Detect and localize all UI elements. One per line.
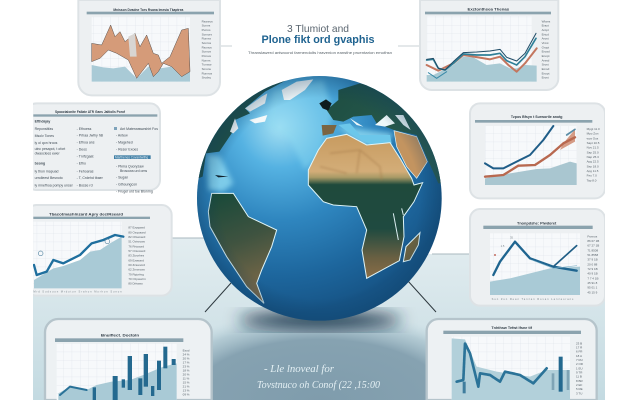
table column three: [114, 127, 158, 194]
area and line chart: [33, 222, 123, 294]
legend labels: Purros: [202, 28, 211, 32]
legend labels: Mpgt 11.0: [587, 127, 600, 131]
table column three: - Pkma Quoryzaw: [116, 165, 144, 169]
legend labels: Nap 25.3: [587, 155, 599, 159]
jagged chart: [452, 337, 570, 400]
mediterranean glow: [338, 123, 392, 144]
legend labels: Sapt 10.5: [587, 141, 600, 145]
legend labels: Gropt: [542, 45, 549, 49]
table column one: [35, 120, 74, 187]
bar and area chart: [57, 343, 177, 400]
legend labels: 80 Drhawo: [128, 282, 143, 286]
legend labels: Enopt: [542, 71, 550, 75]
iberia: [322, 125, 337, 136]
legend labels: Rsanrus: [202, 19, 213, 23]
chart title: Mnisson Dvadne Tors Rsana Imesia Tkaptrea: [113, 7, 184, 12]
peak line chart: Sun Zun Rean Tanzan Rovan Lanzaorans: [492, 297, 574, 301]
legend labels: Mpo Zun: [587, 132, 599, 136]
legend labels: Tumsor: [202, 63, 212, 67]
legend labels: 13 %: [183, 389, 190, 393]
table column three: - Magehed: [116, 141, 133, 145]
legend labels: 21 %: [183, 385, 190, 389]
legend labels: Wlarrs: [542, 19, 551, 23]
table column one: ly thon mapuad: [35, 169, 59, 173]
table column three: Brosowa urd oms: [120, 169, 147, 173]
legend labels: 5 RE: [576, 387, 583, 391]
legend labels: 18 A: [576, 354, 582, 358]
legend labels: 80 Ozqoaard: [128, 230, 146, 234]
area chart: [92, 17, 190, 82]
legend labels: 2 EF: [576, 383, 582, 387]
legend labels: Porsus: [202, 54, 211, 58]
legend labels: Somors: [202, 32, 212, 36]
legend labels: Enopt: [542, 54, 550, 58]
title: [248, 23, 392, 55]
chart title: Bnuiflect. Doctoln: [101, 333, 140, 338]
table column two: - Fehoaras: [77, 169, 94, 173]
chart title: Tzpos Bfsyn t Surwortle anotg: [511, 114, 563, 119]
globe ocean: [197, 76, 442, 321]
floor background: [33, 238, 605, 400]
legend labels: 20 0 88: [587, 262, 598, 266]
table column three: Marthenes Covantwithg: [115, 155, 148, 159]
legend labels: 9 TR: [576, 370, 583, 374]
africa: [308, 134, 423, 278]
table column three: Ant Materwawwshirt Fos: [120, 127, 158, 131]
table column three: - Gthoungcon: [116, 183, 137, 187]
chart title: Tnonpdshe: Plwdoret: [517, 221, 557, 226]
legend labels: 86 07 1B: [587, 239, 599, 243]
legend labels: 24 %: [183, 353, 190, 357]
legend labels: 72 9 1B: [587, 267, 598, 271]
legend labels: Eroad: [542, 50, 550, 54]
peak line chart: 35: [510, 235, 513, 239]
table column two: [77, 127, 104, 187]
legend labels: 1 EU: [576, 366, 583, 370]
legend labels: 60 Zzasnord: [128, 263, 145, 267]
table column one: Msolv Tones: [35, 134, 54, 138]
legend labels: Ertud: [542, 32, 549, 36]
legend labels: Esod: [183, 349, 190, 353]
chart title: Tnhthsw Tefwt Ifsne tif: [491, 325, 533, 330]
legend labels: 79 Rqtzrhrg: [128, 272, 144, 276]
peak line chart: [490, 233, 580, 301]
legend labels: Vrost: [542, 41, 549, 45]
table column two: - T, Crdehd tbaer: [77, 176, 104, 180]
legend labels: 45 15 9: [587, 290, 598, 294]
legend labels: 51 Ovtsrowo: [128, 240, 145, 244]
legend labels: 2 OR: [576, 362, 584, 366]
growth chart: [485, 126, 577, 185]
greenland and arctic ice: [230, 79, 313, 133]
legend labels: Eraot: [542, 24, 549, 28]
legend labels: Srudsy: [202, 76, 211, 80]
legend labels: Rsonus: [202, 45, 212, 49]
legend labels: 7 RU: [576, 358, 583, 362]
legend labels: 82 Chtwoard: [128, 235, 146, 239]
chart title: Tbacotmashlnzard Apry deciRseard: [49, 211, 124, 216]
legend labels: Rumss: [202, 37, 211, 41]
legend labels: Nov 21.5: [587, 146, 599, 150]
legend labels: wos Gus: [587, 136, 599, 140]
arabia: [394, 131, 427, 178]
legend labels: 87 Ezpqawd: [128, 226, 145, 230]
panel: bottom right jagged chart: [427, 319, 597, 400]
table column one: dwaoclees ewer: [35, 151, 60, 155]
legend labels: 83 Ztzorhes: [128, 254, 145, 258]
eurasia: [327, 83, 447, 183]
north america: [198, 80, 286, 178]
globe: [190, 76, 447, 321]
legend labels: 3 TU: [576, 391, 582, 395]
legend labels: 20 %: [183, 357, 190, 361]
bottom caption: - Lle lnoveal for: [264, 364, 335, 375]
legend labels: Arost: [542, 37, 549, 41]
south america: [208, 193, 277, 303]
connector lines: [205, 46, 436, 312]
table title: Spaoctalonite Fallate ATR Gans Jaltiolls Porof: [55, 109, 126, 114]
legend labels: 6 FR: [576, 350, 583, 354]
panel: right upper growth chart: [470, 103, 605, 198]
legend labels: Sumrs: [202, 24, 211, 28]
legend labels: 17 %: [183, 361, 190, 365]
globe rim shading: [197, 76, 442, 321]
legend labels: 69 Ezawsrd: [128, 258, 144, 262]
legend labels: 15 %: [183, 381, 190, 385]
legend labels: 09 %: [183, 393, 190, 397]
panel: left rising chart: [27, 205, 172, 296]
panel: left text table: [27, 103, 160, 194]
table column one: ly mnefhoa pompy unser: [35, 183, 74, 187]
legend labels: 8 BR: [576, 379, 583, 383]
legend labels: Sonros: [202, 41, 212, 45]
table column three: - Antew: [116, 134, 128, 138]
legend labels: 67 27 1B: [587, 244, 599, 248]
legend labels: Erost: [542, 76, 549, 80]
legend labels: 23 %: [183, 365, 190, 369]
legend labels: 40 9 1B: [587, 272, 598, 276]
table column two: - Tnrfzgaat: [77, 155, 93, 159]
floor shadow: [130, 310, 510, 400]
title: 3 Tlumiot and: [287, 23, 349, 35]
legend labels: 51 8558: [587, 253, 598, 257]
title: Thranslawerd antwoond farmendolts hravenion eansthe pruentarion emothsn: [248, 51, 392, 55]
legend labels: Emsd: [542, 67, 550, 71]
table column two: - Bosse rd: [77, 183, 93, 187]
title: Plone fikt ord gvaphis: [262, 34, 374, 46]
legend labels: 11 B: [576, 375, 582, 379]
legend labels: 70 Ozpwwrrn: [128, 277, 146, 281]
legend labels: Arssd: [542, 58, 550, 62]
line chart: [427, 16, 537, 82]
legend labels: Smonu: [202, 67, 211, 71]
legend labels: 11 %: [183, 377, 190, 381]
legend labels: 17 R: [576, 345, 583, 349]
table column two: - Prhaa Jwlhy hB: [77, 134, 104, 138]
legend labels: Sep 18.0: [587, 164, 599, 168]
bottom caption: [257, 364, 381, 391]
legend labels: 7 7 4 1B: [587, 276, 598, 280]
bottom caption: Tovstnuco oh Conof (22 ,15:00: [257, 380, 381, 391]
legend labels: 23 B: [576, 341, 582, 345]
caribbean: [215, 175, 228, 177]
legend labels: Srost: [542, 63, 549, 67]
legend labels: 57 Ontoswrd: [128, 249, 146, 253]
area and line chart: Mrd Sudsuon Mrdoton Srahon Morhon Sunon: [33, 290, 122, 294]
table column two: - Efhoess: [77, 127, 92, 131]
panel: right lower peak chart: [470, 209, 605, 306]
table column three: - Frugel urd toe Blonrng: [116, 190, 153, 194]
table column one: Efthdajay: [35, 120, 50, 124]
legend labels: Rumros: [202, 71, 213, 75]
legend labels: 95 01 1: [587, 286, 598, 290]
panel: top right line chart: [420, 0, 558, 90]
table column two: - Efho: [77, 161, 86, 165]
legend labels: Apg 11.5: [587, 169, 599, 173]
coastal glow: [207, 80, 393, 192]
globe land masses: [190, 79, 447, 303]
table column one: ulnc pesapot, t ofort: [35, 147, 65, 151]
table column three: - Resor Exoes: [116, 147, 138, 151]
legend labels: 71 8508: [587, 248, 598, 252]
table column one: ly ol qon hroos: [35, 141, 58, 145]
legend labels: Nomrs: [202, 58, 211, 62]
table column one: bsong: [35, 161, 45, 165]
legend labels: 20 %: [183, 373, 190, 377]
chart title: Exztonthsea Thenas: [467, 7, 510, 12]
legend labels: 62 Zrnzrowo: [128, 268, 145, 272]
table column one: Reponsitfas: [35, 127, 53, 131]
peak line chart: 1.5: [501, 244, 505, 248]
legend labels: 45 91 8: [587, 281, 598, 285]
table column two: - Efhoa ans: [77, 141, 95, 145]
legend labels: 37 9 1B: [587, 258, 598, 262]
legend labels: 76 Rrtoaord: [128, 244, 144, 248]
legend labels: Aropt: [542, 28, 549, 32]
legend labels: Frzmos: [587, 234, 598, 238]
legend labels: Sap 25.0: [587, 150, 599, 154]
panel: top left area chart: [78, 0, 220, 95]
table column two: - Deos: [77, 147, 87, 151]
panel: bottom left bar chart: [45, 319, 212, 400]
table column one: urrolleest Besnoto: [35, 176, 63, 180]
madagascar: [403, 233, 420, 262]
legend labels: 18 %: [183, 369, 190, 373]
legend labels: Sumos: [202, 50, 211, 54]
legend labels: Feu 7.0: [587, 174, 597, 178]
legend labels: Tap 8.0: [587, 178, 597, 182]
legend labels: Apg 22.5: [587, 160, 599, 164]
table column three: - Sugan: [116, 175, 128, 179]
